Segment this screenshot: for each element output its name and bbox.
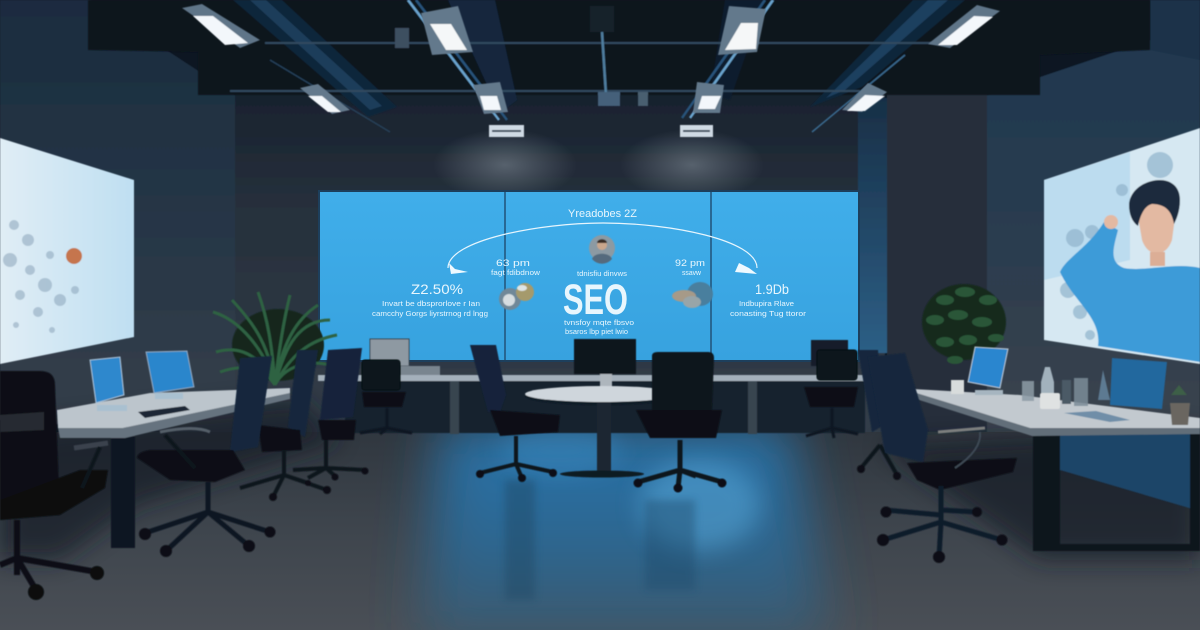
left plant [213,292,337,385]
SEO caption: tvnsfoy mqte fbsvo [564,320,634,327]
right statistic: 1.9Db [755,281,789,297]
right desk [913,347,1200,551]
right statistic: Indbupira Rlave [739,299,794,308]
left statistic: camcchy Gorgs liyrstrnog rd lngg [372,309,488,318]
screen panel dividers [505,192,711,360]
chair: foreground right [868,353,1017,563]
chair: second on left [137,356,276,557]
ceiling lights [182,4,1000,137]
chair: center right [634,352,726,492]
desk bottles [1022,367,1110,406]
left small statistic: 63 pm [496,258,530,269]
right small statistic: 92 pm [675,258,705,269]
office chairs: back row [240,345,901,501]
right rock icon [672,282,713,308]
right statistic: conasting Tug ttoror [730,309,807,318]
wall light glows [433,129,764,201]
chair: back left [360,360,412,434]
chair: center left [470,345,560,482]
right statistic [730,281,807,318]
chair: third on left [240,350,331,501]
left small statistic [491,258,541,277]
desk notebook [1064,411,1130,422]
right plant [922,284,1006,364]
small white cup [951,380,964,394]
left wall poster [0,138,134,364]
left rock icon [499,283,534,310]
floor shadow under desks [0,400,1200,560]
video wall screen [318,190,860,362]
left desk [57,351,290,548]
chair: behind right front [857,350,901,480]
floor [0,400,1200,630]
screen heading: Yreadobes 2Z [568,208,637,220]
back desk row [318,339,878,434]
left statistic: Invart be dbsprorlove r Ian [382,299,480,308]
office chairs: front row [0,353,1017,600]
left statistic [372,281,488,318]
desk cup [1040,393,1060,409]
left small statistic: fagt fdibdnow [491,270,541,277]
right small statistic [675,258,705,277]
central round table with monitor [525,339,679,478]
chair: back right [804,350,858,438]
chair: foreground left [0,371,108,600]
SEO title: SEO [563,276,628,324]
SEO caption: bsaros lbp piet lwio [565,329,628,336]
left statistic: Z2.50% [411,281,463,297]
floor screen reflection [420,425,830,630]
person figure [1060,180,1200,362]
presenter avatar [589,235,615,264]
avatar caption: tdnisfiu dinvws [577,271,628,278]
right small statistic: ssavw [682,270,702,277]
SEO caption [564,320,634,336]
potted cactus [1170,385,1190,425]
curved arrow arc [448,223,757,274]
right wall poster with person [1044,128,1200,364]
ceiling with ducts and rails [88,0,1150,132]
chair: fourth on left [293,348,368,480]
